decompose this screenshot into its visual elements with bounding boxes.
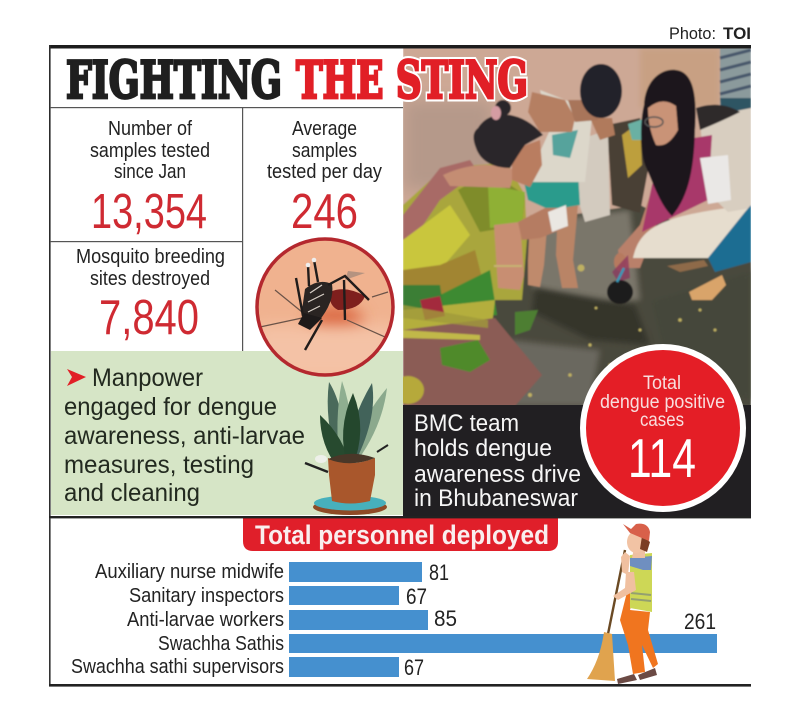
stat: mosquito breeding sites destroyed: 7,840	[99, 291, 199, 345]
chart: personnel bar chart: 67	[406, 584, 427, 609]
stat: samples tested since January: since Jan	[114, 161, 186, 183]
stat: samples tested since January: samples tested	[90, 140, 210, 162]
stat: average samples per day	[267, 118, 382, 239]
stat: samples tested since January	[90, 118, 210, 239]
panel: photo caption: in Bhubaneswar	[414, 485, 578, 512]
panel: manpower note: measures, testing	[64, 451, 254, 479]
panel: manpower note: awareness, anti-larvae	[64, 422, 305, 450]
wall and ground	[403, 48, 724, 220]
callout: total dengue positive cases: dengue positive	[600, 392, 725, 413]
right woman	[617, 200, 657, 269]
chart: personnel bar chart: 67	[404, 655, 424, 680]
heading: total personnel deployed: Total personnel deployed	[255, 520, 549, 550]
stat: mosquito breeding sites destroyed	[76, 246, 225, 345]
chart: personnel bar chart: Anti-larvae workers	[127, 609, 284, 631]
photo credit: TOI	[723, 24, 751, 43]
stat: average samples per day: samples	[292, 140, 357, 162]
stat: samples tested since January: 13,354	[91, 185, 207, 239]
callout: total dengue positive cases: Total	[643, 373, 681, 394]
title: THE STING	[296, 51, 528, 111]
stat: samples tested since January: Number of	[108, 118, 192, 140]
panel: photo caption: holds dengue	[414, 435, 552, 462]
stat: mosquito breeding sites destroyed: sites destroyed	[90, 268, 210, 290]
bowl	[607, 280, 633, 304]
chart: personnel bar chart: 261	[684, 609, 716, 634]
title	[66, 51, 528, 111]
chart: personnel bar chart: 85	[434, 606, 457, 631]
panel: stats frame lines	[49, 45, 751, 517]
chart: personnel bar chart: Sanitary inspectors	[129, 585, 284, 607]
panel: manpower note: Manpower	[92, 364, 203, 392]
photo credit: Photo:	[669, 24, 716, 43]
panel: manpower note: and cleaning	[64, 479, 200, 507]
chart: personnel bar chart: Swachha sathi supervisors	[71, 656, 284, 678]
panel: photo of BMC team	[392, 48, 751, 406]
title: FIGHTING	[66, 51, 282, 111]
stat: mosquito breeding sites destroyed: Mosquito breeding	[76, 246, 225, 268]
stat: average samples per day: Average	[292, 118, 357, 140]
panel: bottom frame lines	[49, 516, 751, 687]
callout: total dengue positive cases: cases	[640, 410, 684, 431]
title: THE STING	[296, 51, 528, 111]
goat and cloth	[607, 118, 648, 213]
stat: average samples per day: tested per day	[267, 161, 382, 183]
left woman	[403, 163, 527, 300]
icon: sweeper with broom	[587, 524, 658, 684]
person at top right	[720, 48, 751, 110]
callout: total dengue positive cases	[583, 347, 743, 509]
photo credit	[669, 24, 751, 43]
chart: personnel bar chart: 81	[429, 560, 449, 585]
chart: personnel bar chart: Auxiliary nurse midwife	[95, 561, 284, 583]
chart: personnel bar chart: Swachha Sathis	[158, 633, 284, 655]
chart: personnel bar chart	[71, 560, 717, 680]
panel: manpower note	[51, 351, 403, 515]
stat: average samples per day: 246	[291, 185, 358, 239]
panel: photo caption: BMC team	[414, 410, 519, 437]
icon: potted plant with mosquitoes	[305, 381, 388, 515]
panel: photo caption: awareness drive	[414, 461, 581, 488]
panel: manpower note: engaged for dengue	[64, 393, 277, 421]
panel: photo caption	[403, 405, 751, 518]
child	[578, 130, 610, 222]
icon: mosquito on skin	[255, 239, 395, 380]
callout: total dengue positive cases: 114	[628, 427, 696, 489]
